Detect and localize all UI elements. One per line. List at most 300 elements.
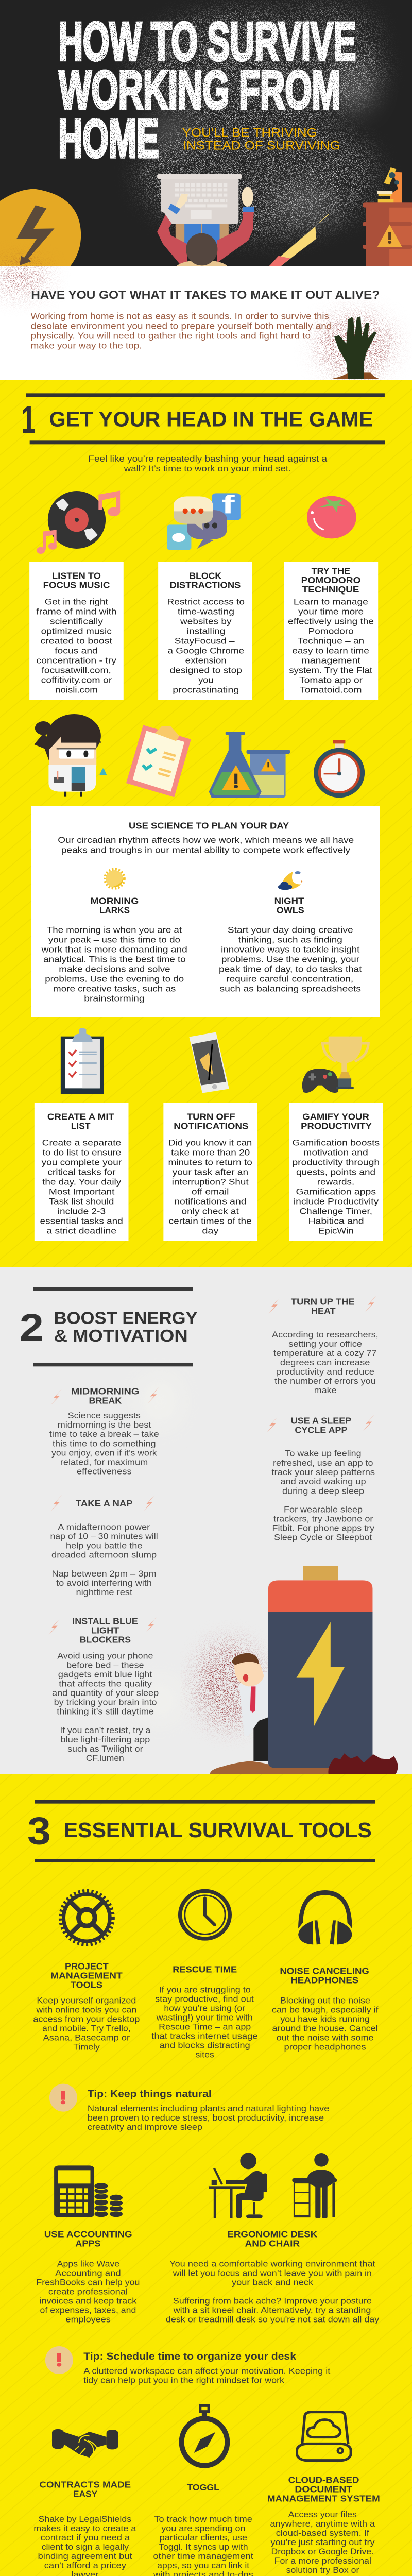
icon: laptop worker xyxy=(157,174,254,266)
body: thinking it’s still daytime xyxy=(57,1707,154,1716)
body: dreaded afternoon slump xyxy=(52,1550,157,1560)
icon: trophy and controller xyxy=(302,1037,368,1093)
body: a Google Chrome xyxy=(168,646,244,655)
body: Get in the right xyxy=(45,597,108,606)
subtitle: INSTEAD OF SURVIVING xyxy=(183,139,340,152)
heading: BREAK xyxy=(89,1395,122,1405)
heading xyxy=(50,1961,123,1990)
block: turn up the heat xyxy=(268,1295,379,1395)
body: critical tasks for xyxy=(47,1167,115,1177)
heading: POMODORO xyxy=(301,575,361,585)
card: listen to focus music xyxy=(29,562,124,700)
heading: boost energy and motivation: & MOTIVATION xyxy=(54,1327,188,1346)
heading: MIDMORNING xyxy=(71,1386,139,1396)
heading: Tip: Schedule time to organize your desk xyxy=(83,2351,296,2362)
block: use accounting apps xyxy=(36,2229,140,2324)
heading: APPS xyxy=(75,2238,100,2248)
text: section intro xyxy=(88,454,327,473)
body: you complete your xyxy=(42,1158,122,1167)
body: access from your desktop xyxy=(33,2014,140,2024)
body: of expenses, taxes, and xyxy=(40,2306,136,2315)
heading xyxy=(267,2475,380,2504)
text block: make your way to the top. xyxy=(31,341,142,351)
body: To wake up feeling xyxy=(285,1449,362,1459)
body: Technique – an xyxy=(298,636,364,646)
body: your time more xyxy=(298,607,364,616)
body: notifications and xyxy=(174,1197,247,1206)
body: gadgets emit blue light xyxy=(58,1670,152,1679)
body: scientifically xyxy=(50,617,103,626)
heading: HEADPHONES xyxy=(290,1975,358,1985)
block: rescue time xyxy=(151,1964,258,2059)
icon: tomato xyxy=(307,496,356,538)
heading: BLOCKERS xyxy=(80,1634,131,1645)
heading: LARKS xyxy=(99,905,130,916)
body: time-wasting xyxy=(178,607,234,616)
icon: gear xyxy=(61,1891,112,1944)
block: ergonomic desk and chair xyxy=(166,2229,379,2324)
body xyxy=(58,835,354,855)
body: system. Try the Flat xyxy=(289,666,372,675)
body: track your sleep patterns xyxy=(272,1467,375,1477)
heading: RESCUE TIME xyxy=(173,1964,237,1974)
blood splatter xyxy=(198,1643,260,1726)
body xyxy=(151,1985,258,2059)
icon: bolts xyxy=(267,1415,374,1433)
heading: TOGGL xyxy=(187,2482,219,2493)
body: only check at xyxy=(182,1207,239,1216)
body: Blocking out the noise xyxy=(280,1996,370,2006)
body: include 2-3 xyxy=(58,1207,106,1216)
illustrations: hazard, worker, barrel xyxy=(0,167,412,266)
heading xyxy=(44,2229,132,2248)
block: install blue light blockers xyxy=(48,1616,159,1763)
text block: physically. You will need to gather the right tools and fight hard to xyxy=(31,331,311,341)
body: sites xyxy=(196,2050,214,2059)
heading: USE ACCOUNTING xyxy=(44,2229,132,2239)
icon: bolts xyxy=(268,1295,376,1314)
block: take a nap xyxy=(50,1495,158,1597)
heading: PRODUCTIVITY xyxy=(301,1121,372,1131)
body: proper headphones xyxy=(284,2042,366,2052)
body: to avoid interfering with xyxy=(56,1578,152,1588)
body: off email xyxy=(192,1187,229,1196)
body: and avoid waking up xyxy=(280,1477,366,1486)
icon: compass xyxy=(182,2405,227,2466)
body: trackers, try Jawbone or xyxy=(273,1514,373,1523)
icon: man xyxy=(232,1653,268,1761)
body: StayFocusd – xyxy=(175,636,235,646)
body: Gamification apps xyxy=(296,1187,376,1196)
body: minutes to return to xyxy=(168,1158,252,1167)
body: Gamification boosts xyxy=(292,1138,380,1147)
icon: vinyl record xyxy=(37,490,120,554)
body xyxy=(272,1330,379,1395)
heading: HEAT xyxy=(311,1306,336,1316)
card: pomodoro technique xyxy=(284,562,378,700)
icon: scientist xyxy=(34,714,107,797)
icon: sun xyxy=(105,870,124,888)
heading: DISTRACTIONS xyxy=(170,580,241,590)
icon: bolts xyxy=(50,1387,159,1405)
body: interruption? Shut xyxy=(172,1177,249,1187)
body: your back and neck xyxy=(232,2278,313,2287)
body: Avoid using your phone xyxy=(57,1651,153,1660)
callout: tip keep things natural xyxy=(49,2084,329,2132)
icon: muted phone xyxy=(189,1032,229,1093)
body: Pomodoro xyxy=(308,626,354,636)
body: wasting!) your time with xyxy=(156,2013,253,2022)
heading: USE SCIENCE TO PLAN YOUR DAY xyxy=(129,820,289,831)
heading: MORNING xyxy=(91,895,139,906)
body: Tomato app or xyxy=(299,675,363,685)
icon: microscope xyxy=(377,167,402,203)
body: Rescue Time – an app xyxy=(159,2022,251,2031)
heading: CLOUD-BASED xyxy=(288,2475,359,2485)
body xyxy=(288,597,374,694)
body xyxy=(166,2259,379,2324)
body: you have kids running xyxy=(280,2014,370,2024)
body: and quantity of your sleep xyxy=(52,1688,159,1698)
icon: headphones xyxy=(298,1890,352,1944)
body: include Productivity xyxy=(294,1197,379,1206)
text: section intro: Feel like you’re repeatedly bashing your head against a xyxy=(88,454,327,464)
body xyxy=(33,1996,140,2052)
body: contract if you need a xyxy=(41,2533,130,2543)
body: Nap between 2pm – 3pm xyxy=(52,1569,157,1579)
body: your task after an xyxy=(173,1167,248,1177)
body: take more than 20 xyxy=(171,1148,250,1157)
body: To track how much time xyxy=(154,2514,252,2524)
body: frame of mind with xyxy=(36,607,117,616)
icon: stopwatch xyxy=(314,740,365,798)
card: gamify your productivity xyxy=(289,1103,383,1241)
blood splatter xyxy=(0,265,391,374)
body: Challenge Timer, xyxy=(300,1207,372,1216)
body: during a deep sleep xyxy=(282,1486,364,1496)
body xyxy=(270,2510,375,2576)
body: apps, so you can link it xyxy=(157,2561,249,2570)
body: If you are struggling to xyxy=(159,1985,251,1994)
heading: LISTEN TO xyxy=(52,570,101,581)
heading: PROJECT xyxy=(65,1961,109,1971)
body: Accounting and xyxy=(55,2268,121,2278)
body xyxy=(168,1138,252,1235)
icon: soil xyxy=(210,1761,334,1774)
heading xyxy=(91,895,139,916)
body: innovative ways to tackle insight xyxy=(221,945,359,955)
panel: use science to plan your day xyxy=(31,806,380,1017)
heading: essential survival tools xyxy=(27,1800,375,1862)
illustration: man crushed by battery xyxy=(210,1566,398,1774)
icon: paint streak xyxy=(269,214,329,266)
body: Asana, Basecamp or xyxy=(43,2033,130,2043)
body: you are spending on xyxy=(161,2523,246,2533)
title xyxy=(58,11,356,168)
icon: ergonomic desk and chair xyxy=(209,2153,337,2218)
body: and mobile. Try Trello, xyxy=(42,2024,131,2033)
body: you enjoy, even if it’s work xyxy=(52,1448,157,1458)
body: client to sign a legally xyxy=(42,2542,129,2552)
body: invoices and keep track xyxy=(40,2296,136,2306)
heading: get your head in the game: 1 xyxy=(21,398,36,441)
body: Start your day doing creative xyxy=(228,925,353,935)
block: project management tools xyxy=(33,1961,140,2052)
icon: calculator and coins xyxy=(54,2165,123,2217)
body: help you battle the xyxy=(66,1541,143,1550)
heading xyxy=(71,1386,139,1405)
body: other time management xyxy=(153,2551,253,2561)
icon: zombie hand xyxy=(330,316,381,379)
body: The morning is when you are at xyxy=(47,925,182,935)
body xyxy=(33,2514,136,2576)
body: to do list to ensure xyxy=(43,1148,121,1157)
panel: section 3 xyxy=(0,1774,412,2576)
body: For wearable sleep xyxy=(284,1505,363,1514)
body xyxy=(40,1138,123,1235)
heading xyxy=(274,895,304,916)
body: that affects the quality xyxy=(59,1679,152,1688)
body: time to take a break – take xyxy=(49,1429,159,1439)
body: such as Twilight or xyxy=(67,1744,143,1754)
icon: exclamation xyxy=(49,2084,77,2112)
body: work that is more demanding and xyxy=(41,945,187,955)
heading: EASY xyxy=(73,2488,97,2499)
heading: Tip: Keep things natural xyxy=(88,2089,212,2099)
callout: tip schedule time xyxy=(45,2346,330,2385)
heading xyxy=(170,570,241,590)
heading: boost energy and motivation xyxy=(20,1287,198,1366)
icon: moon xyxy=(278,871,302,890)
heading: LIST xyxy=(71,1121,91,1131)
heading xyxy=(43,570,110,590)
body xyxy=(153,2514,253,2576)
body: noisli.com xyxy=(55,685,98,694)
body: concentration - try xyxy=(36,656,116,665)
icon: bolts xyxy=(48,1617,157,1635)
heading: TOOLS xyxy=(71,1979,102,1990)
body: problems. Use the evening to do xyxy=(45,974,184,984)
body: Habitica and xyxy=(308,1216,364,1226)
night owls xyxy=(219,895,362,994)
body xyxy=(49,1411,159,1476)
body: Sleep Cycle or Sleepbot xyxy=(274,1533,372,1543)
body: creativity and improve sleep xyxy=(88,2122,202,2132)
body: CF.lumen xyxy=(86,1753,124,1763)
heading: NOTIFICATIONS xyxy=(174,1121,249,1131)
subtitle xyxy=(182,126,340,152)
heading: CONTRACTS MADE xyxy=(40,2479,131,2490)
icon: electric hazard xyxy=(0,189,81,266)
body: essential tasks and xyxy=(40,1216,123,1226)
heading xyxy=(174,1111,249,1131)
heading: DOCUMENT xyxy=(295,2484,352,2495)
heading: AND CHAIR xyxy=(245,2238,300,2248)
subtitle: YOU'LL BE THRIVING xyxy=(182,126,317,140)
body: focusatwill.com, xyxy=(42,666,111,675)
body: make decisions and solve xyxy=(59,964,170,974)
icon: battery xyxy=(268,1566,372,1768)
heading xyxy=(40,2479,131,2499)
body: more creative tasks, such as xyxy=(53,984,176,994)
block: toggl xyxy=(153,2482,253,2576)
body: Learn to manage xyxy=(294,597,368,606)
title: HOME xyxy=(58,108,159,168)
body: solution try Box or xyxy=(286,2565,359,2575)
block: noise canceling headphones xyxy=(272,1965,379,2052)
icon: hazard barrel xyxy=(363,202,412,266)
body: focus and xyxy=(55,646,98,655)
card: turn off notifications xyxy=(163,1103,258,1241)
body: Shake by LegalShields xyxy=(38,2514,131,2524)
body: If you can’t resist, try a xyxy=(60,1725,150,1735)
heading: CYCLE APP xyxy=(295,1425,347,1435)
block: cloud-based document management xyxy=(267,2475,380,2576)
body: cloud-based system. If xyxy=(276,2528,370,2538)
body: a strict deadline xyxy=(46,1226,116,1235)
body: Keep yourself organized xyxy=(37,1996,136,2006)
body: by tricking your brain into xyxy=(54,1698,157,1707)
body: degrees can increase xyxy=(280,1358,370,1367)
text block xyxy=(31,311,332,351)
body: stay productive, find out xyxy=(155,1994,254,2004)
body: rewards. xyxy=(317,1177,354,1187)
icon: dark mound xyxy=(328,1753,398,1774)
panel: section 2 xyxy=(0,1267,412,1774)
body: productivity through xyxy=(292,1158,380,1167)
heading: BLOCK xyxy=(189,570,221,581)
body: analytical. This is the best time to xyxy=(43,955,186,964)
heading: LIGHT xyxy=(91,1625,119,1636)
body: A midafternoon power xyxy=(58,1522,150,1532)
body: Tomatoid.com xyxy=(300,685,362,694)
heading xyxy=(47,1111,114,1131)
icon: handshake xyxy=(52,2429,118,2458)
heading: GAMIFY YOUR xyxy=(302,1111,369,1122)
body: before bed – these xyxy=(66,1660,144,1670)
body: optimized music xyxy=(41,626,112,636)
heading xyxy=(291,1296,355,1316)
body xyxy=(83,2366,330,2385)
body: Timely xyxy=(73,2042,100,2052)
heading: TRY THE xyxy=(312,566,350,576)
body xyxy=(36,2259,140,2324)
heading: essential survival tools: 3 xyxy=(27,1809,51,1853)
body: effectiveness xyxy=(77,1467,132,1476)
heading: TECHNIQUE xyxy=(302,584,359,595)
body: with online tools you can xyxy=(36,2005,136,2015)
heading: INSTALL BLUE xyxy=(72,1616,138,1626)
body: effectively using the xyxy=(288,617,374,626)
body: productivity and reduce xyxy=(276,1367,374,1377)
body: installing xyxy=(187,626,225,636)
body: require careful concentration, xyxy=(226,974,353,984)
body: related, for maximum xyxy=(60,1458,148,1467)
block: midmorning break xyxy=(49,1386,159,1476)
body xyxy=(272,1449,375,1543)
heading: NOISE CANCELING xyxy=(280,1965,369,1976)
panel: hero header xyxy=(0,0,412,266)
body: and blocks distracting xyxy=(160,2041,250,2050)
body: binding agreement but xyxy=(38,2551,132,2561)
body: quests, points and xyxy=(296,1167,375,1177)
body: setting your office xyxy=(288,1339,362,1349)
body: extension xyxy=(185,656,227,665)
body: designed to stop xyxy=(170,666,242,675)
heading: TURN OFF xyxy=(187,1111,235,1122)
body: FreshBooks can help you xyxy=(36,2278,140,2287)
body xyxy=(50,1522,158,1597)
panel: section 1 xyxy=(0,380,412,1267)
heading: TURN UP THE xyxy=(291,1296,355,1307)
body: management xyxy=(301,656,360,665)
body: Toggl. It syncs up with xyxy=(159,2542,248,2552)
panel: intro xyxy=(0,265,412,380)
body: easy to learn time xyxy=(292,646,369,655)
icon: social distractions: f xyxy=(221,490,235,519)
body xyxy=(36,597,117,694)
body: particular clients, use xyxy=(160,2533,247,2543)
heading: ERGONOMIC DESK xyxy=(227,2229,318,2239)
heading: TAKE A NAP xyxy=(76,1498,133,1509)
body: EpicWin xyxy=(318,1226,354,1235)
body xyxy=(167,597,245,694)
body: can't afford a pricey xyxy=(44,2561,126,2570)
body: motivation and xyxy=(303,1148,368,1157)
card: block distractions xyxy=(158,562,252,700)
body: nap of 10 – 30 minutes will xyxy=(50,1532,158,1541)
body: this time to do something xyxy=(53,1439,156,1448)
heading xyxy=(72,1616,138,1645)
body: your peak – use this time to do xyxy=(48,935,180,945)
body: midmorning is the best xyxy=(58,1420,151,1430)
body: day xyxy=(202,1226,219,1235)
body: tidy can help put you in the right mindset for work xyxy=(83,2376,284,2385)
icon: clock xyxy=(178,1889,232,1941)
body: brainstorming xyxy=(84,994,145,1004)
block: contracts made easy xyxy=(33,2479,136,2576)
body: make xyxy=(314,1385,337,1395)
body: the day. Your daily xyxy=(42,1177,121,1187)
heading: USE A SLEEP xyxy=(291,1415,351,1426)
body xyxy=(219,925,362,994)
body: employees xyxy=(66,2315,111,2324)
body: certain times of the xyxy=(169,1216,252,1226)
heading: FOCUS MUSIC xyxy=(43,580,110,590)
body: refreshed, use an app to xyxy=(273,1458,373,1468)
body: nighttime rest xyxy=(76,1587,132,1597)
body: created to boost xyxy=(41,636,112,646)
body: such as balancing spreadsheets xyxy=(220,984,361,994)
morning larks xyxy=(41,895,187,1004)
body xyxy=(41,925,187,1004)
body: how you’re using (or xyxy=(164,2004,245,2013)
body xyxy=(292,1138,380,1235)
body xyxy=(52,1651,159,1763)
body: makes it easy to create a xyxy=(33,2523,136,2533)
heading: OWLS xyxy=(277,905,304,916)
icon: bolts xyxy=(50,1495,155,1511)
grunge texture xyxy=(134,5,381,237)
body: For a more professional xyxy=(274,2556,371,2566)
heading xyxy=(227,2229,318,2248)
heading: CREATE A MIT xyxy=(47,1111,114,1122)
body: Create a separate xyxy=(42,1138,121,1147)
icon: MIT list clipboard xyxy=(61,1028,104,1094)
body: that tracks internet usage xyxy=(151,2031,258,2041)
card: create a MIT list xyxy=(35,1103,128,1241)
body: you xyxy=(198,675,213,685)
